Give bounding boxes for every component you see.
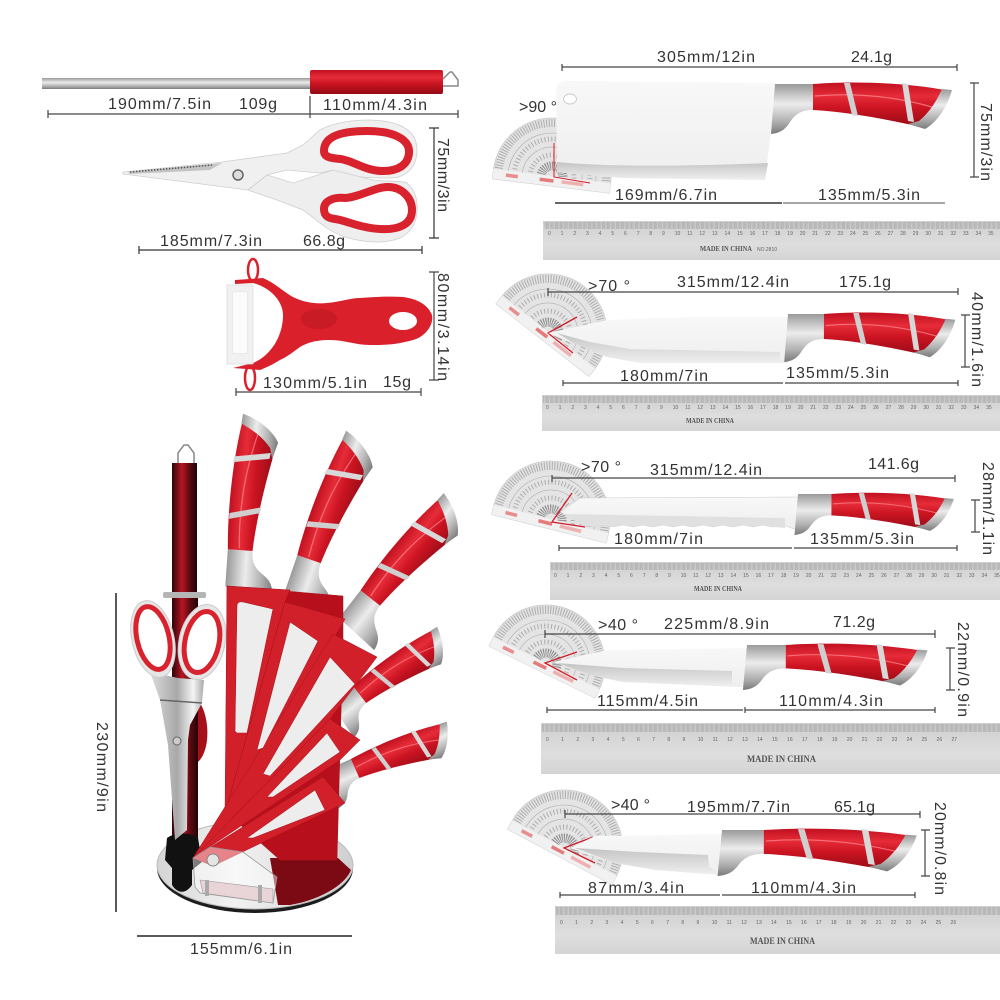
protractor [468,250,631,412]
protractor angle lines [548,317,577,353]
dimensions: 135mm/5.3in [818,187,920,204]
utility blade [553,648,748,687]
knife block set [124,413,477,913]
scissors product [123,120,417,242]
ruler [550,562,1000,600]
scissors dimensions: 66.8g [303,233,345,250]
scissors dimensions: 75mm/3in [434,138,451,212]
ruler [541,723,1000,774]
acrylic holder [193,847,277,903]
ruler: 0 1 2 3 4 5 6 7 8 9 10 11 12 13 14 15 16 17 18 19 20 21 22 23 24 25 26 27 28 29 30 31 32 33 34 35 [554,573,1000,579]
block width dimension: 155mm/6.1in [190,941,292,958]
chef blade [548,317,788,363]
dimensions: 65.1g [834,799,875,816]
sharpener product [42,70,458,94]
cleaver panel [487,49,1000,260]
dimensions [552,456,996,555]
ruler: 0 1 2 3 4 5 6 7 8 9 10 11 12 13 14 15 16 17 18 19 20 21 22 23 24 25 26 27 28 29 30 31 32 33 34 35 [546,405,992,411]
peeler dimensions: 130mm/5.1in [263,375,367,392]
ruler [555,906,1000,954]
dimensions: 169mm/6.7in [615,187,717,204]
utility knife panel [469,585,1000,774]
dimensions: >40 ° [598,617,638,634]
dimensions: 22mm/0.9in [954,622,971,717]
ruler: MADE IN CHINA [747,754,816,764]
dimensions: 141.6g [868,456,919,473]
dimensions: 110mm/4.3in [751,880,856,897]
dimensions: 315mm/12.4in [650,462,762,479]
dimensions: 135mm/5.3in [786,365,889,382]
paring blade [570,834,723,875]
dimensions: 20mm/0.8in [931,802,948,895]
ruler: 0 1 2 3 4 5 6 7 8 9 10 11 12 13 14 15 16 17 18 19 20 21 22 23 24 25 26 [560,920,956,926]
ruler: 0 1 2 3 4 5 6 7 8 9 10 11 12 13 14 15 16 17 18 19 20 21 22 23 24 25 26 27 [546,737,957,743]
dimensions: 87mm/3.4in [588,880,684,897]
protractor [469,585,625,738]
dimensions: >70 ° [588,278,630,295]
dimensions: 195mm/7.7in [687,799,790,816]
scissors in stand [124,596,232,840]
sharpener dimensions [48,96,458,118]
bread knife panel [481,448,1000,600]
rotating base [157,821,353,913]
ruler: MADE IN CHINA [694,585,742,593]
peeler dimensions: 15g [383,374,411,391]
ruler: MADE IN CHINA [700,245,752,253]
dimensions: >90 ° [519,99,557,116]
dimensions: 75mm/3in [977,103,994,181]
red fan block [193,586,377,866]
ruler [543,221,1000,260]
utility handle [743,644,928,690]
peeler product [227,259,432,390]
block height dimension: 230mm/9in [93,722,110,812]
dimensions: 28mm/1.1in [979,462,996,555]
ruler: MADE IN CHINA [686,417,734,425]
dimensions: >40 ° [611,797,650,814]
dimensions: 225mm/8.9in [664,616,769,633]
dimensions: 24.1g [851,49,892,66]
peeler dimensions: 80mm/3.14in [434,273,451,381]
dimensions: 115mm/4.5in [597,693,698,710]
protractor angle lines [552,493,585,527]
dimensions: 315mm/12.4in [677,274,789,291]
red disc behind rod [198,700,207,762]
bread blade [560,497,800,530]
dimensions [545,614,971,717]
dimensions: 71.2g [833,614,875,631]
dimensions [548,274,985,387]
white block windows [235,602,355,838]
cleaver blade [556,81,777,180]
paring handle [718,829,917,876]
ruler: 0 1 2 3 4 5 6 7 8 9 10 11 12 13 14 15 16 17 18 19 20 21 22 23 24 25 26 27 28 29 30 31 32 33 34 35 [548,231,994,237]
dimensions: >70 ° [581,459,621,476]
dimensions [560,797,948,898]
scissors dimensions: 185mm/7.3in [160,233,262,250]
sharpener dimensions: 190mm/7.5in [108,96,211,113]
ruler: NO.2810 [757,247,777,253]
chef handle [784,313,955,362]
dimensions: 180mm/7in [620,368,708,385]
peeler dimensions [236,272,451,396]
bread handle [794,493,954,535]
sharpener dimensions: 109g [239,96,277,113]
protractor [487,111,618,238]
protractor angle lines [564,837,595,863]
dimensions: 40mm/1.6in [968,292,985,387]
paring knife panel [487,769,1000,954]
cleaver handle [771,82,952,134]
ruler [542,395,1000,431]
knife handles [224,413,477,808]
dimensions: 180mm/7in [614,531,703,548]
chef knife panel [468,250,1000,431]
dimensions: 135mm/5.3in [810,531,914,548]
ruler: MADE IN CHINA [750,936,815,946]
protractor angle lines [545,652,577,680]
dimensions: 110mm/4.3in [779,693,883,710]
dimensions: 175.1g [839,274,891,291]
scissors dimensions [139,128,451,254]
dimensions [519,49,994,204]
sharpener dimensions: 110mm/4.3in [323,97,427,114]
sharpening rod in stand [163,445,206,892]
protractor [481,448,623,587]
protractor [487,769,644,924]
dimensions: 305mm/12in [657,49,755,66]
